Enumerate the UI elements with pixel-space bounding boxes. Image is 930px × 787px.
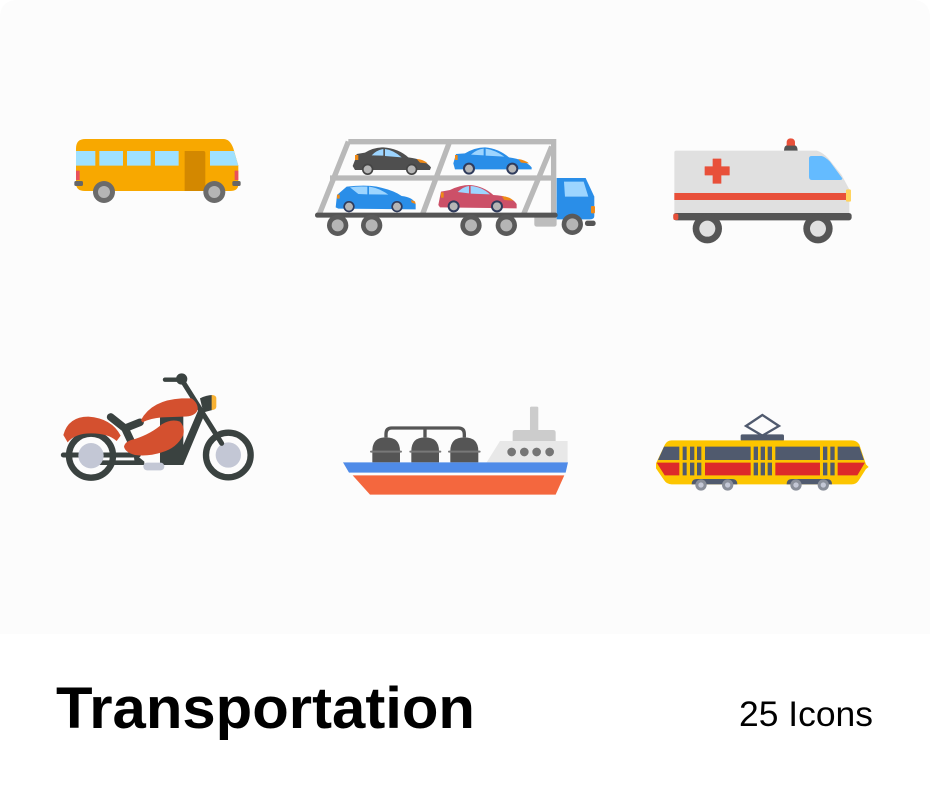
icon: gas tanker ship [343, 407, 568, 495]
icon: ambulance [673, 138, 852, 243]
icon: motorcycle [63, 373, 251, 478]
icon: tram [656, 415, 869, 491]
icon: bus [74, 139, 241, 203]
icon: car carrier truck [315, 142, 596, 236]
car: blue top right [453, 147, 532, 175]
car: red [438, 185, 517, 212]
car: dark sedan [353, 147, 431, 175]
title: Transportation [56, 676, 475, 741]
car: blue bottom left [336, 186, 416, 212]
icon count label: 25 Icons [739, 695, 873, 734]
